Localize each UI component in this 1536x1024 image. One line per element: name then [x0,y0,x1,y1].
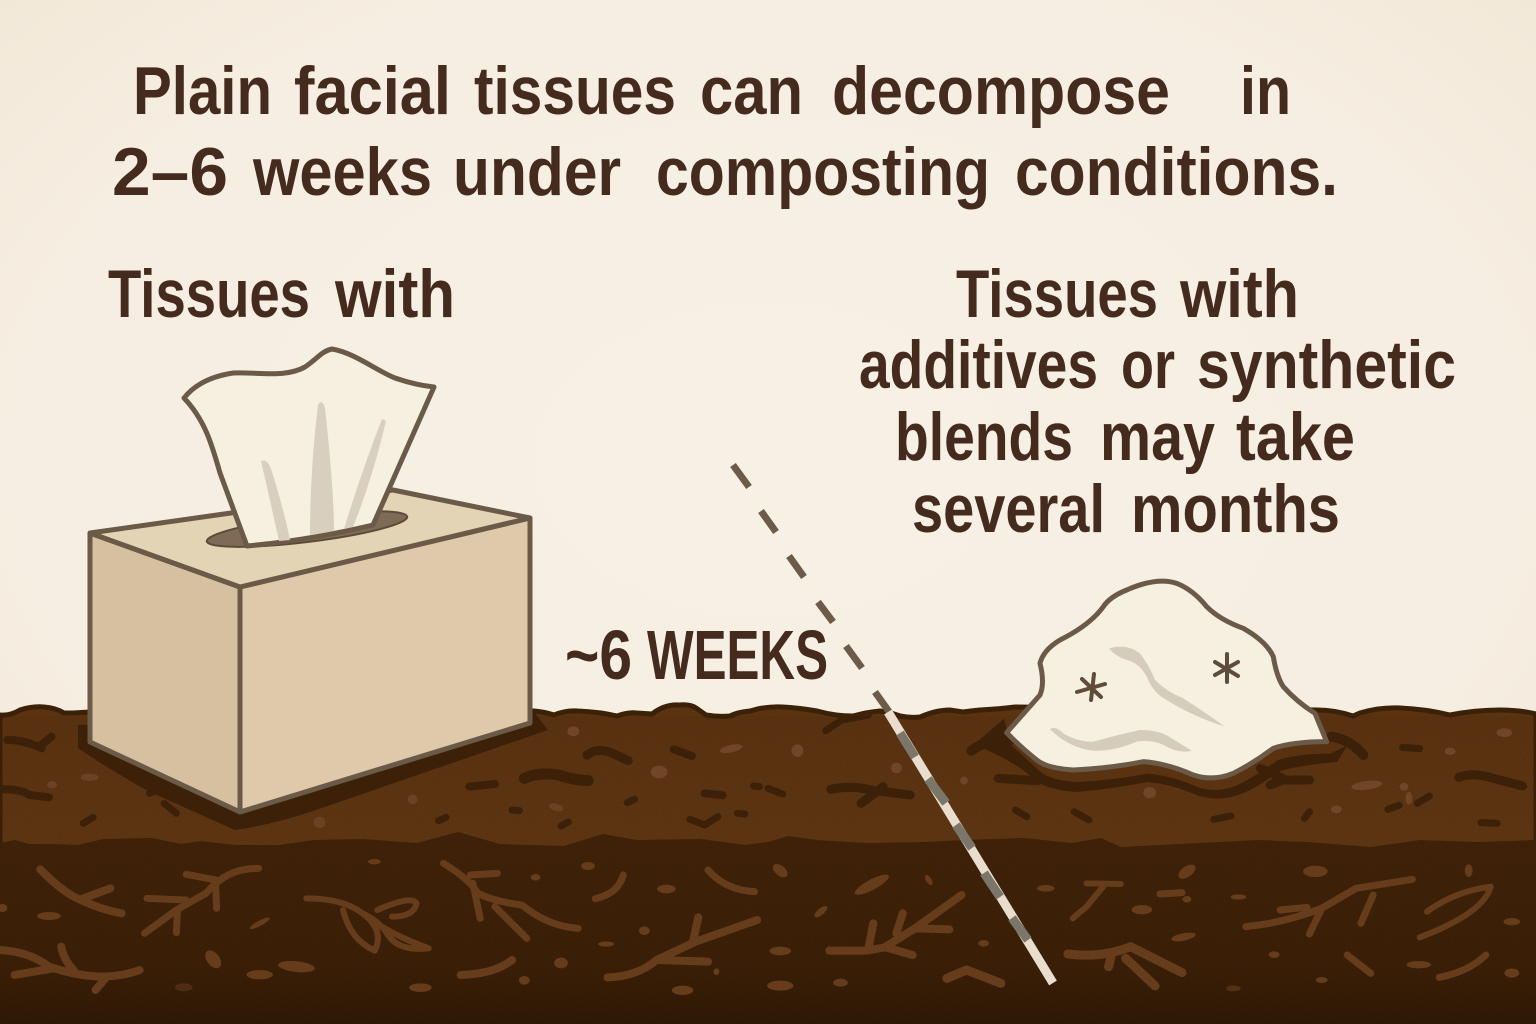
right label: may [1100,399,1215,475]
time label [565,616,828,694]
title: under [453,134,621,210]
title: 2–6 [112,134,228,210]
right label: or [1121,327,1175,403]
box shadow on soil [78,712,548,830]
asterisk mark left [1077,674,1105,700]
right label: blends [895,399,1073,475]
time label: WEEKS [647,616,828,694]
right label: take [1236,399,1355,475]
title [112,53,1338,210]
box left face [90,533,240,812]
subsoil layer [0,832,1536,1024]
right label: synthetic [1197,327,1456,403]
right label: with [1179,256,1299,332]
title: tissues [474,53,676,129]
topsoil layer [0,705,1536,860]
left label: with [334,256,455,332]
title: can [700,53,803,129]
right label: months [1131,471,1340,547]
time label: ~6 [565,616,632,694]
tissue fold shadows [261,402,386,541]
title: decompose [832,53,1170,129]
dashed line above ground [733,465,890,713]
left label: Tissues [108,256,310,332]
title: weeks [252,134,432,210]
box opening [205,504,409,554]
crumpled tissue pile [974,581,1347,799]
dark clods in topsoil, left [0,726,760,828]
tissue box [78,349,548,830]
roots and debris, right [767,862,1520,991]
title: conditions. [1015,134,1338,210]
title: facial [294,53,451,129]
pile fold shadows [1050,647,1225,752]
right label [859,256,1456,547]
soil cross-section [0,705,1536,1024]
title: composting [656,134,990,210]
asterisk mark right [1215,654,1238,682]
title: in [1240,53,1291,129]
soil grain texture [0,716,1536,1024]
right label: additives [859,327,1098,403]
pile body [1007,581,1327,778]
title: Plain [133,53,272,129]
roots and debris, left [0,859,757,995]
pile shadow [974,719,1347,799]
right label: Tissues [956,256,1158,332]
dashed line and striped stake [733,465,1053,983]
dark clods in topsoil, right [768,715,1523,823]
box top face [90,490,530,587]
striped stake in soil [888,712,1053,983]
tissue sheet [184,349,434,546]
box right face [240,518,530,812]
right label: several [912,471,1105,547]
